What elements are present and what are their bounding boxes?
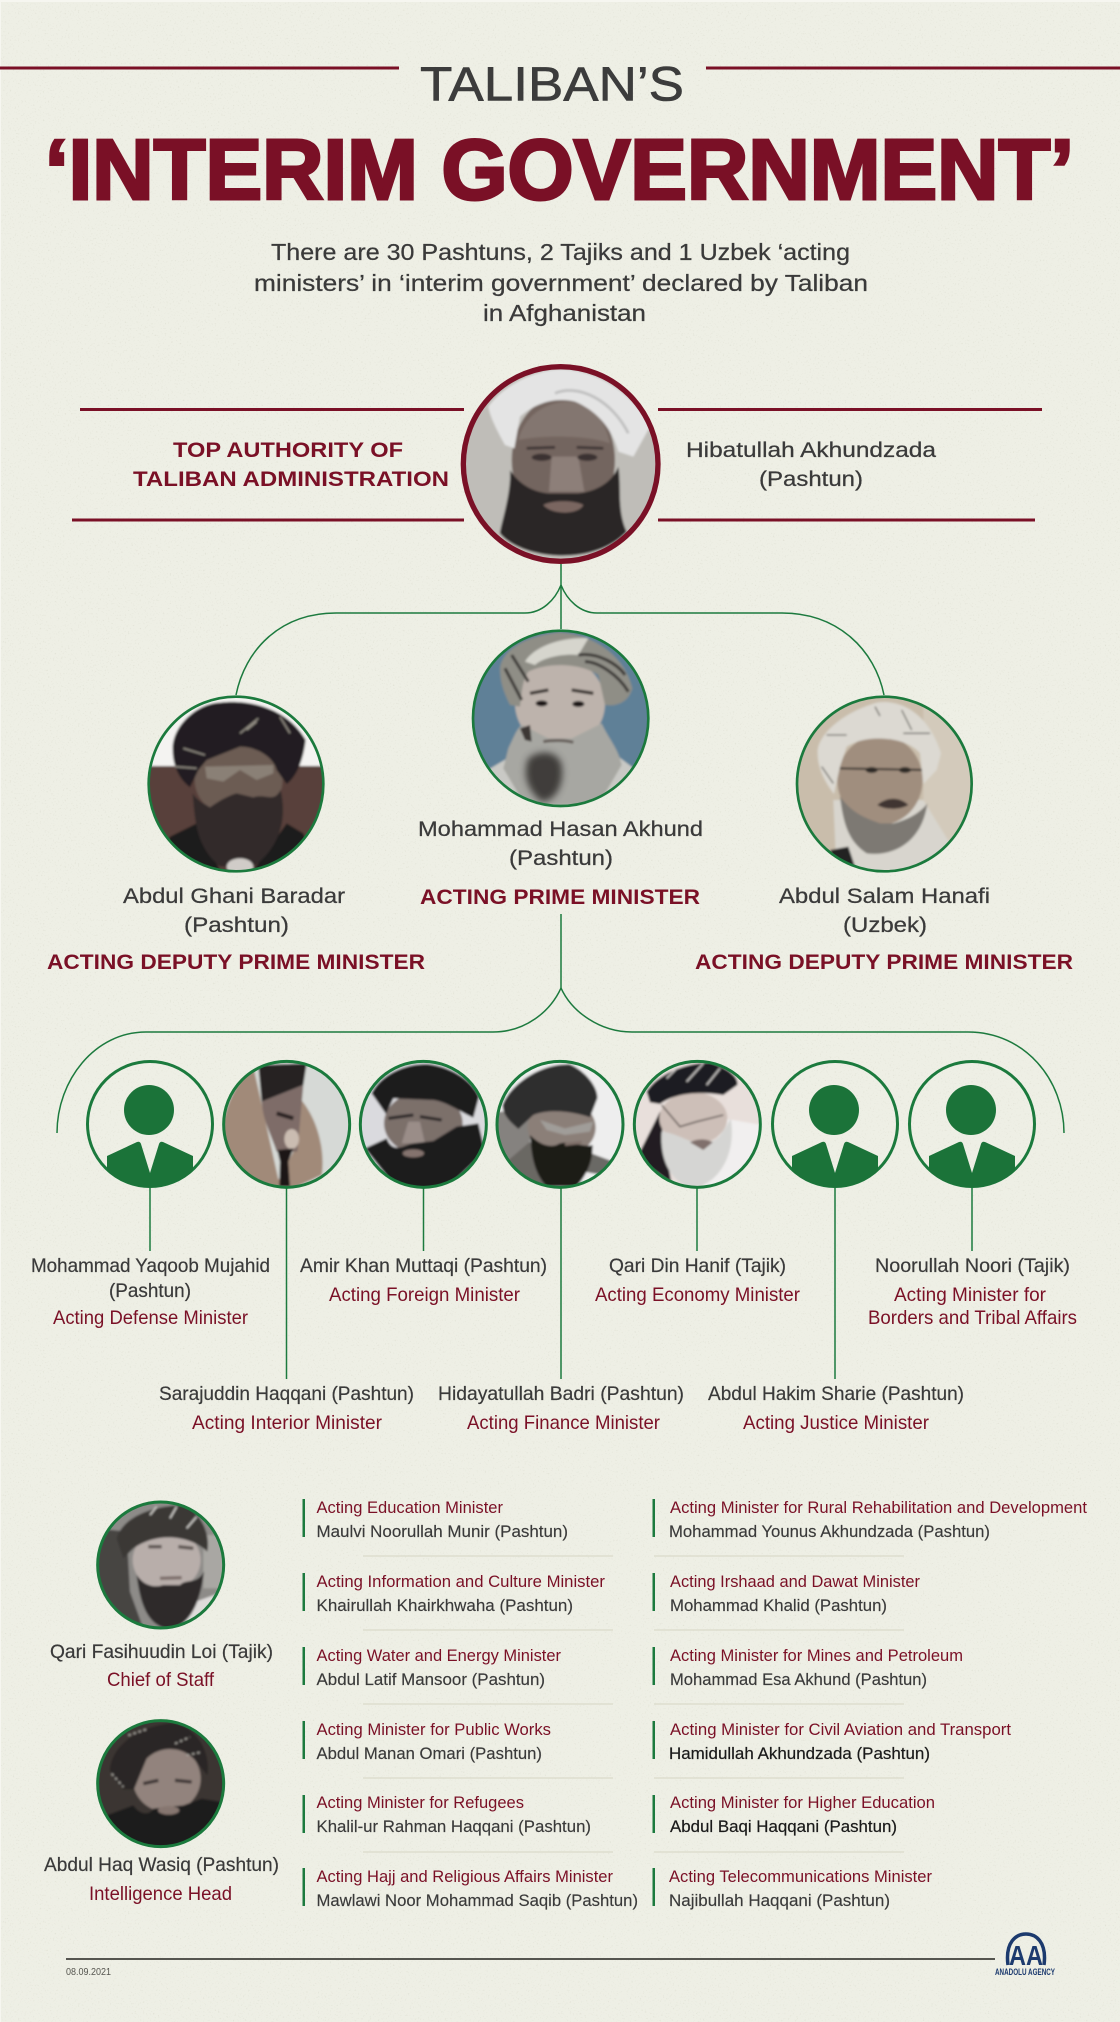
subtitle: There are 30 Pashtuns, 2 Tajiks and 1 Uzbek ‘acting xyxy=(271,239,850,265)
text: Abdul Hakim Sharie xyxy=(708,1383,964,1434)
list item: civil aviation and transport: Acting Minister for Civil Aviation and Transport xyxy=(670,1721,1011,1739)
list item: mines and petroleum: Mohammad Esa Akhund (Pashtun) xyxy=(670,1671,927,1689)
list item: water and energy: Abdul Latif Mansoor (Pashtun) xyxy=(316,1671,545,1689)
name: Abdul Ghani Baradar xyxy=(47,885,425,974)
text: Sarajuddin Haqqani xyxy=(159,1383,414,1434)
list item: telecommunications: Acting Telecommunications Minister xyxy=(669,1868,932,1886)
portrait: Mohammad Hasan Akhund xyxy=(472,629,650,808)
name: Mohammad Hasan Akhund: Mohammad Hasan Akhund xyxy=(418,818,703,841)
text: Hidayatullah Badri xyxy=(438,1383,684,1434)
name: Abdul Ghani Baradar: (Pashtun) xyxy=(184,914,289,937)
text: Abdul Haq Wasiq: Abdul Haq Wasiq (Pashtun) xyxy=(44,1854,279,1876)
list item: higher education: Acting Minister for Higher Education xyxy=(670,1794,935,1812)
portrait: Qari Din Hanif xyxy=(630,1058,763,1192)
text: Noorullah Noori xyxy=(868,1255,1077,1329)
list item: refugees xyxy=(302,1794,591,1836)
date: 08.09.2021 xyxy=(66,1967,111,1978)
list item: public works: Acting Minister for Public Works xyxy=(316,1721,551,1739)
list item: mines and petroleum: Acting Minister for Mines and Petroleum xyxy=(670,1647,963,1665)
list item: irshaad and dawat: Acting Irshaad and Dawat Minister xyxy=(670,1573,920,1591)
list item: telecommunications: Najibullah Haqqani (Pashtun) xyxy=(669,1892,890,1910)
list item: mines and petroleum xyxy=(652,1647,963,1689)
name: Abdul Ghani Baradar: ACTING DEPUTY PRIME MINISTER xyxy=(47,951,425,974)
text: Amir Khan Muttaqi xyxy=(300,1255,547,1306)
subtitle: ministers’ in ‘interim government’ declared by Taliban xyxy=(254,270,868,296)
name: Abdul Salam Hanafi: ACTING DEPUTY PRIME MINISTER xyxy=(695,951,1073,974)
text: Mohammad Yaqoob Mujahid xyxy=(31,1255,270,1329)
text: Qari Fasihuudin Loi: Qari Fasihuudin Loi (Tajik) xyxy=(50,1641,273,1663)
text: Sarajuddin Haqqani: Sarajuddin Haqqani (Pashtun) xyxy=(159,1383,414,1405)
list item: hajj and religious affairs: Acting Hajj and Religious Affairs Minister xyxy=(316,1868,613,1886)
list item: hajj and religious affairs xyxy=(302,1868,638,1910)
list item: higher education: Abdul Baqi Haqqani (Pashtun) xyxy=(670,1818,897,1836)
logo: Anadolu Agency xyxy=(995,1934,1055,1977)
list item: rural rehabilitation: Mohammad Younus Akhundzada (Pashtun) xyxy=(669,1523,990,1541)
list item: information and culture xyxy=(302,1573,606,1615)
portrait: Sarajuddin Haqqani xyxy=(220,1058,353,1192)
name: Abdul Salam Hanafi xyxy=(695,885,1073,974)
logo: Anadolu Agency: AA xyxy=(1009,1940,1043,1971)
list item: information and culture: Acting Information and Culture Minister xyxy=(316,1573,606,1591)
text: Abdul Hakim Sharie: Abdul Hakim Sharie (Pashtun) xyxy=(708,1383,964,1405)
text: Abdul Hakim Sharie: Acting Justice Minister xyxy=(743,1412,929,1434)
list separators xyxy=(363,1556,904,1852)
text: Hidayatullah Badri: Hidayatullah Badri (Pashtun) xyxy=(438,1383,684,1405)
list item: public works xyxy=(302,1721,551,1763)
list item: water and energy xyxy=(302,1647,562,1689)
portrait: Hibatullah Akhundzada xyxy=(460,364,661,564)
connector: prime minister to ministers xyxy=(57,914,1064,1133)
heading: top authority: TALIBAN ADMINISTRATION xyxy=(133,468,449,491)
list item: information and culture: Khairullah Khairkhwaha (Pashtun) xyxy=(316,1597,573,1615)
name: Mohammad Hasan Akhund: ACTING PRIME MINISTER xyxy=(420,886,700,909)
minister stems xyxy=(150,1188,972,1379)
top authority rules xyxy=(72,408,1042,522)
list item: refugees: Acting Minister for Refugees xyxy=(316,1794,524,1812)
portrait: Abdul Ghani Baradar xyxy=(147,695,325,873)
subtitle: in Afghanistan xyxy=(483,300,646,326)
name: Hibatullah Akhundzada xyxy=(686,439,936,491)
list item: rural rehabilitation xyxy=(652,1499,1087,1541)
list item: rural rehabilitation: Acting Minister for Rural Rehabilitation and Development xyxy=(670,1499,1087,1517)
text: Amir Khan Muttaqi: Amir Khan Muttaqi (Pashtun) xyxy=(300,1255,547,1277)
name: Abdul Salam Hanafi: (Uzbek) xyxy=(843,914,927,937)
list item: irshaad and dawat xyxy=(652,1573,920,1615)
list item: irshaad and dawat: Mohammad Khalid (Pashtun) xyxy=(670,1597,887,1615)
text: Noorullah Noori: Acting Minister for xyxy=(894,1284,1046,1306)
portrait: Qari Fasihuudin Loi xyxy=(97,1502,230,1635)
portrait: Abdul Haq Wasiq xyxy=(97,1720,230,1854)
text: Abdul Haq Wasiq xyxy=(44,1854,279,1905)
text: Mohammad Yaqoob Mujahid: (Pashtun) xyxy=(109,1280,191,1302)
portrait: Abdul Salam Hanafi xyxy=(796,695,973,873)
list item: telecommunications xyxy=(652,1868,932,1910)
name: Abdul Salam Hanafi: Abdul Salam Hanafi xyxy=(779,885,990,908)
heading: top authority: TOP AUTHORITY OF xyxy=(173,439,403,462)
list item: education xyxy=(302,1499,568,1541)
list item: hajj and religious affairs: Mawlawi Noor Mohammad Saqib (Pashtun) xyxy=(316,1892,638,1910)
text: Qari Fasihuudin Loi: Chief of Staff xyxy=(107,1669,215,1691)
text: Qari Din Hanif: Acting Economy Minister xyxy=(595,1284,800,1306)
name: Mohammad Hasan Akhund: (Pashtun) xyxy=(509,847,613,870)
list item: education: Maulvi Noorullah Munir (Pashtun) xyxy=(316,1523,568,1541)
text: Qari Din Hanif xyxy=(595,1255,800,1306)
text: Sarajuddin Haqqani: Acting Interior Minister xyxy=(192,1412,382,1434)
text: Mohammad Yaqoob Mujahid: Mohammad Yaqoob Mujahid xyxy=(31,1255,270,1277)
text: Amir Khan Muttaqi: Acting Foreign Minister xyxy=(329,1284,520,1306)
list item: refugees: Khalil-ur Rahman Haqqani (Pashtun) xyxy=(316,1818,591,1836)
title: ‘INTERIM GOVERNMENT’ xyxy=(45,123,1074,218)
name: Hibatullah Akhundzada: (Pashtun) xyxy=(759,468,863,491)
text: Mohammad Yaqoob Mujahid: Acting Defense Minister xyxy=(53,1307,248,1329)
logo: Anadolu Agency: ANADOLU AGENCY xyxy=(995,1967,1055,1977)
icon: person placeholder, borders minister xyxy=(910,1062,1034,1188)
icon: person placeholder, justice minister xyxy=(772,1062,898,1188)
list item: public works: Abdul Manan Omari (Pashtun) xyxy=(316,1745,542,1763)
icon: person placeholder, defense minister xyxy=(88,1062,212,1188)
name: Mohammad Hasan Akhund xyxy=(418,818,703,909)
text: Abdul Haq Wasiq: Intelligence Head xyxy=(89,1883,232,1905)
text: Qari Din Hanif: Qari Din Hanif (Tajik) xyxy=(609,1255,786,1277)
subtitle xyxy=(254,239,868,326)
footer rule xyxy=(66,1958,995,1960)
text: Noorullah Noori: Noorullah Noori (Tajik) xyxy=(875,1255,1070,1277)
portrait: Amir Khan Muttaqi xyxy=(357,1058,490,1192)
list item: civil aviation and transport: Hamidullah Akhundzada (Pashtun) xyxy=(669,1745,930,1763)
name: Hibatullah Akhundzada: Hibatullah Akhundzada xyxy=(686,439,936,462)
list item: civil aviation and transport xyxy=(652,1721,1011,1763)
text: Qari Fasihuudin Loi xyxy=(50,1641,273,1691)
text: Hidayatullah Badri: Acting Finance Minister xyxy=(467,1412,660,1434)
connector: top to deputies xyxy=(236,564,884,695)
title xyxy=(0,58,1120,218)
title: TALIBAN’S xyxy=(420,58,684,112)
name: Abdul Ghani Baradar: Abdul Ghani Baradar xyxy=(123,885,345,908)
list item: education: Acting Education Minister xyxy=(316,1499,503,1517)
portrait: Hidayatullah Badri xyxy=(493,1058,627,1192)
heading: top authority xyxy=(133,439,449,491)
list item: water and energy: Acting Water and Energy Minister xyxy=(316,1647,562,1665)
list item: higher education xyxy=(652,1794,935,1836)
text: Noorullah Noori: Borders and Tribal Affairs xyxy=(868,1307,1077,1329)
